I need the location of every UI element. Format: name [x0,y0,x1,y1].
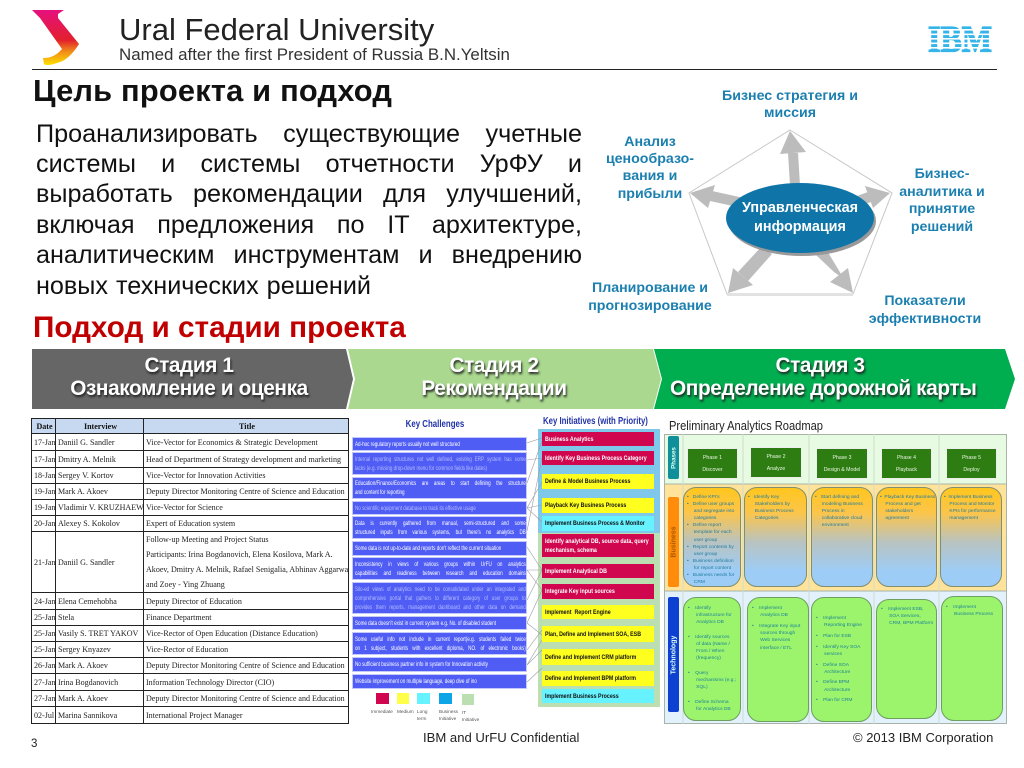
challenge list: Some data is not up-to-date and reports don't reflect the current situation [355,545,501,552]
interview table: Vice-Rector of Open Education (Distance Education) [146,629,318,638]
technology column 2: Web Services [760,638,790,643]
priority legend [371,693,479,722]
phase 4: Playback [896,467,917,473]
business column 1: user group [694,538,717,543]
technology column 1: Analytics DB [696,620,724,625]
technology activities [683,596,1003,722]
phase boxes [687,447,997,479]
challenge list: Ad-hoc regulatory reports usually not well structured [355,440,460,448]
phase 2: Analyze [767,466,785,472]
technology column 5: • Implement [946,605,976,610]
challenge list: Some useful info not include in current report(e.g. students failed twice [355,636,526,642]
interview table: Daniil G. Sandler [58,558,115,566]
challenge list: provides them reports, management dashboard and other data on demand [355,604,526,610]
phase 4 [881,448,932,479]
interview table: Vice-Rector of Education [146,645,228,654]
interview table: Information Technology Director (CIO) [146,678,274,686]
footer copyright: © 2013 IBM Corporation [853,730,993,745]
center label: management information [742,200,858,234]
technology column 1: of data (Name / [696,642,730,647]
key challenges heading: Key Challenges [406,418,464,430]
interview table: Sergey Knyazev [58,645,111,654]
label: pricing analysis: ценообразо- [606,151,694,167]
phase 1: Discover [702,467,723,473]
business column 3: modeling Business [822,502,863,507]
business column 1 [683,487,741,587]
phase 3: Design & Model [824,467,860,473]
label: performance indicators: эффективности [869,310,981,326]
technology column 1: (frequency) [696,656,721,661]
interview table: Marina Sannikova [58,710,117,720]
technology column 2 [747,597,809,722]
technology column 1: SQL) [696,685,708,690]
phase 5 [946,448,997,479]
business column 1: • Define report [687,523,721,528]
side: phases [668,436,679,479]
challenge list: No scientific equipment database to track its effective usage [355,504,476,512]
label: pricing analysis: вания и [623,168,677,184]
goal paragraph: Проанализировать существующие учетные [36,120,582,148]
business column 3: collaborative cloud [822,516,862,521]
technology column 1: From / When [696,649,724,654]
interview table: 24-Jan [34,596,55,606]
business column 1: categories [694,516,716,521]
side: technology: Technology [670,635,677,674]
technology column 1: • Define Schema [688,700,729,705]
business column 4 [876,487,937,587]
side: business: Business [670,526,677,558]
business column 1: • Business needs for [687,573,734,578]
challenge list: No sufficient business partner info in system for Innovation activity [355,661,488,668]
challenge list: Website improvement on multiple language, deep dive of ino [355,678,477,685]
goal paragraph: системы и системы отчетности УрФУ и [36,150,582,178]
initiative list: Plan, Define and Implement SOA, ESB [545,630,641,638]
technology column 1 [683,597,741,721]
interview table: Mark A. Akoev [58,661,108,670]
interview table: 17-Jan [34,438,55,446]
business column 2: • Identify Key [748,495,779,500]
interview table: Vice-Vector for Economics & Strategic Development [146,438,318,446]
interview table: 26-Jan [34,661,55,670]
interview table: Vice-Vector for Innovation Activities [146,471,266,480]
business column 1: and segregate into [694,509,734,514]
label: business analytics: Бизнес- [915,166,969,182]
label: pricing analysis [606,134,694,202]
legend: immediate [371,693,393,714]
interview table: Mark A. Akoev [58,694,108,703]
phase 5: Phase 5 [962,455,981,461]
interview table: 02-Jul [34,710,54,720]
interview table: Irina Bogdanovich [58,678,118,686]
phase 4: Phase 4 [897,455,916,461]
interview table: Stela [58,613,74,622]
legend: business initiative [439,693,458,721]
interview table: 27-Jan [34,678,55,686]
interview table: Finance Department [146,613,211,622]
business column 1: for report content [694,566,731,571]
interview table: and Zoey - Ying Zhuang [146,580,225,589]
interview table [31,418,349,724]
legend: business initiative: Business [439,709,458,714]
goal paragraph: новых технических решений [36,272,371,300]
interview table: Date [36,422,53,430]
business column 1: • Define KPI's [687,495,720,500]
challenge list: Silo-ed views of analytics need to be consolidated under an integrated and [355,586,526,592]
business column 2 [744,487,807,587]
business column 1: • Business definition [687,559,734,564]
technology column 5: Business Process [954,612,993,617]
interview table: Deputy Director of Education [146,596,242,606]
interview table: Participants: Irina Bogdanovich, Elena Kosilova, Mark A. [146,550,333,559]
initiative list: Implement Report Engine [545,608,611,616]
side: technology [668,597,679,712]
interview table: Follow-up Meeting and Project Status [146,535,268,544]
legend: IT initiative: IT [462,710,466,715]
interview table: Vice-Vector for Science [146,503,223,512]
goal paragraph: включая предложения по IT архитектуре, [36,211,582,239]
interview table: 19-Jan [34,503,55,512]
business column 1: template for each [694,530,732,535]
initiative list: Define and Implement CRM platform [545,654,636,660]
legend: long term: term [417,716,426,721]
interview table: Deputy Director Monitoring Centre of Science and Education [146,487,345,496]
technology column 1: • Query [688,671,708,676]
interview table: Interview [84,422,117,430]
pentagon diagram [688,130,892,296]
goal paragraph [36,120,582,300]
stage 1 text: Стадия 1 [144,354,234,377]
interview table: Elena Cemehobha [58,596,117,606]
technology column 1: infrastructure for [696,613,732,618]
label: business analytics: принятие [909,201,975,217]
challenge list: Inconsistency in views of various groups within UrFU on analytics [355,560,526,568]
challenge list: Education/Finance/Economics are areas to start defining the structure [355,480,526,487]
label: performance indicators [869,293,981,326]
interview table: Deputy Director Monitoring Centre of Science and Education [146,661,345,670]
initiative list: Identify Key Business Process Category [545,454,647,462]
roadmap side labels [668,436,679,712]
technology column 3: Architecture • Define BPM [816,670,850,685]
technology column 3: • Implement [816,616,846,621]
business column 4: stakeholders [885,509,913,514]
label: business analytics: аналитика и [899,184,985,200]
challenge list: Some data doesn't exist in current system e.g. No. of disabled student [355,620,496,626]
business column 3: environment [822,523,849,528]
university logo [32,10,79,65]
label: planning: прогнозирование [588,298,712,314]
center label: management information: Управленческая [742,200,858,216]
challenge list: on 1 subject, students with excellent diploma, NO. of electronic books) [355,644,526,652]
stage chevrons [32,349,1015,409]
technology column 2: • Implement [752,606,782,611]
interview table: Vladimir V. KRUZHAEW [58,503,144,512]
stage 2 text [421,354,568,403]
technology column 3: Architecture • Plan for CRM [816,688,852,703]
legend: IT initiative [462,694,479,722]
interview table: 19-Jan [34,487,55,496]
interview table: Expert of Education system [146,519,235,528]
phase 2 [750,447,802,478]
initiative list: Implement Business Process & Monitor [545,520,645,527]
technology column 2: Analytics DB • Integrate Key input [752,613,800,629]
challenge list: Data is currently gathered from manual, semi-structured and some [355,520,526,526]
stage 1 text [70,354,310,402]
label: performance indicators: Показатели [884,293,966,309]
technology column 3: services • Define SOA [816,652,849,668]
phase 3: Phase 3 [832,455,852,461]
roadmap title: Preliminary Analytics Roadmap [669,419,823,433]
initiative list: Playback Key Business Process [545,502,626,509]
technology column 3: Reporting Engine • Plan for ESB • Identify Key SOA [816,623,862,650]
technology column 4: • Implement ESB, [881,607,923,612]
label: planning [588,280,712,314]
legend: long term: Long [417,709,427,714]
interview table: International Project Manager [146,710,243,720]
initiative list [542,432,654,703]
business column 5: • Implement Business [944,495,992,500]
business column 5: Process and Monitor [949,502,994,507]
initiatives background [538,429,660,707]
interview table: Vasily S. TRET YAKOV [58,629,138,638]
interview table: 18-Jan [34,471,55,480]
header title: Ural Federal University [119,12,434,47]
goal paragraph: выработать рекомендации для улучшений, [36,180,582,208]
business column 2: Categories [755,516,778,521]
challenge list: Internal reporting structures not well defined, existing ERP system has some [355,456,526,462]
business column 5 [940,487,1002,587]
interview table: Akoev, Dmitry A. Melnik, Rafael Senigalia, Abhinav Aggarwal [146,565,348,574]
interview table: Head of Department of Strategy development and marketing [146,454,341,464]
stage 3 text: Стадия 3 [775,354,865,377]
business column 4: • Playback Key Business [880,495,935,500]
legend: immediate: Immediate [371,709,393,714]
business activities [683,487,1002,587]
business column 1: • Define user groups [687,502,734,507]
label: business strategy: Бизнес стратегия и [722,88,858,104]
business column 1: user group [694,552,717,557]
business column 5: management [949,516,978,521]
legend: medium: Medium [397,709,414,714]
challenge list: structured inputs from various systems, but there's no analytics DB [355,528,526,536]
stage 2 text: Рекомендации [421,377,567,400]
legend: IT initiative: Initiative [462,717,479,722]
stage 3 text: Определение дорожной карты [670,377,977,400]
roadmap grid [664,434,1007,724]
interview table: 20-Jan [34,519,55,528]
business column 1: • Report contents by [687,545,734,550]
section heading: Подход и стадии проекта [33,311,406,344]
technology column 1: mechanisms (e.g.; [696,678,736,683]
label: business analytics [899,166,985,234]
initiative list: Define and Implement BPM platform [545,675,636,682]
technology column 1: • Identify [688,606,711,611]
label: business strategy [722,88,858,121]
technology column 5 [941,596,1003,721]
business column 2: Business Process [755,509,794,514]
stage 1 text: Ознакомление и оценка [70,377,308,400]
label: pricing analysis: Анализ [624,134,676,150]
interview table: 27-Jan [34,694,55,703]
business column 3: • Start defining and [815,495,859,500]
center label: management information: информация [754,218,846,234]
interview table: Dmitry A. Melnik [58,454,116,464]
initiative list: Define & Model Business Process [545,478,630,485]
business column 4: agreement [885,516,909,521]
connector lines [527,438,542,682]
challenge list [352,437,527,689]
phase 1 [687,448,738,479]
legend: long term [417,693,430,721]
goal paragraph: аналитическим инструментам и внедрению [36,241,582,269]
interview table: 17-Jan [34,454,55,464]
interview table: 25-Jan [34,629,55,638]
legend: business initiative: Initiative [439,716,456,721]
side: business [668,497,679,587]
challenge list: and content for reporting [355,489,405,496]
technology column 1: • Identify sources [688,635,729,640]
business column 2: Stakeholders by [755,502,790,507]
interview table: Deputy Director Monitoring Centre of Science and Education [146,694,345,703]
technology column 2: sources through [760,631,795,636]
interview table: Sergey V. Kortov [58,471,114,480]
stage 3 text [670,354,978,403]
interview table: 25-Jan [34,645,55,654]
label: business strategy: миссия [764,105,816,121]
label: business analytics: решений [911,218,973,234]
initiative list: Integrate Key input sources [545,588,615,595]
stage 2 text: Стадия 2 [449,354,539,377]
interview table: Daniil G. Sandler [58,438,115,446]
interview table: Alexey S. Kokolov [58,519,120,528]
side: phases: Phases [670,447,677,468]
challenge list: capabilities and readiness between research and education domains [355,570,526,576]
challenge list: comprehensive portal that gathers to different category of user groups to [355,594,526,602]
phase 2: Phase 2 [766,454,786,460]
interview table: 25-Jan [34,613,55,622]
interview table: Title [239,422,255,430]
initiative list: Implement Business Process [545,692,619,700]
initiative list: Business Analytics [545,436,593,442]
phase 3 [816,448,868,479]
business column 5: KPIs for performance [949,509,996,514]
business column 4: Process and get [885,502,921,507]
technology column 2: interface / ETL [760,646,792,651]
main heading: Цель проекта и подход [33,73,392,108]
initiative list: Identify analytical DB, source data, query [545,538,649,544]
initiative list: Implement Analytical DB [545,568,607,574]
challenge list: lacks (e.g. missing drop-down menu for common fields like dates) [355,464,487,472]
legend: medium [397,693,414,714]
technology column 1: for Analytics DB [696,707,731,712]
technology column 4: CRM, BPM Platform [889,621,933,626]
business column 3 [811,487,873,587]
technology column 4 [876,599,937,719]
label: pricing analysis: прибыли [618,186,682,202]
key initiatives heading: Key Initiatives (with Priority) [543,416,648,427]
business column 3: Process in [822,509,845,514]
page number: 3 [31,738,37,750]
label: planning: Планирование и [592,280,708,296]
header subtitle: Named after the first President of Russia B.N.Yeltsin [119,45,510,64]
initiative list: mechanism, schema [545,546,597,554]
footer confidentiality note: IBM and UrFU Confidential [423,730,579,745]
technology column 4: SOA Services, [889,614,921,619]
interview table: 21-Jan [34,558,55,566]
phase 5: Deploy [963,467,980,473]
technology column 3 [811,597,872,722]
interview table: Mark A. Akoev [58,487,108,496]
phase 1: Phase 1 [703,455,722,461]
business column 1: CRM [694,580,705,585]
